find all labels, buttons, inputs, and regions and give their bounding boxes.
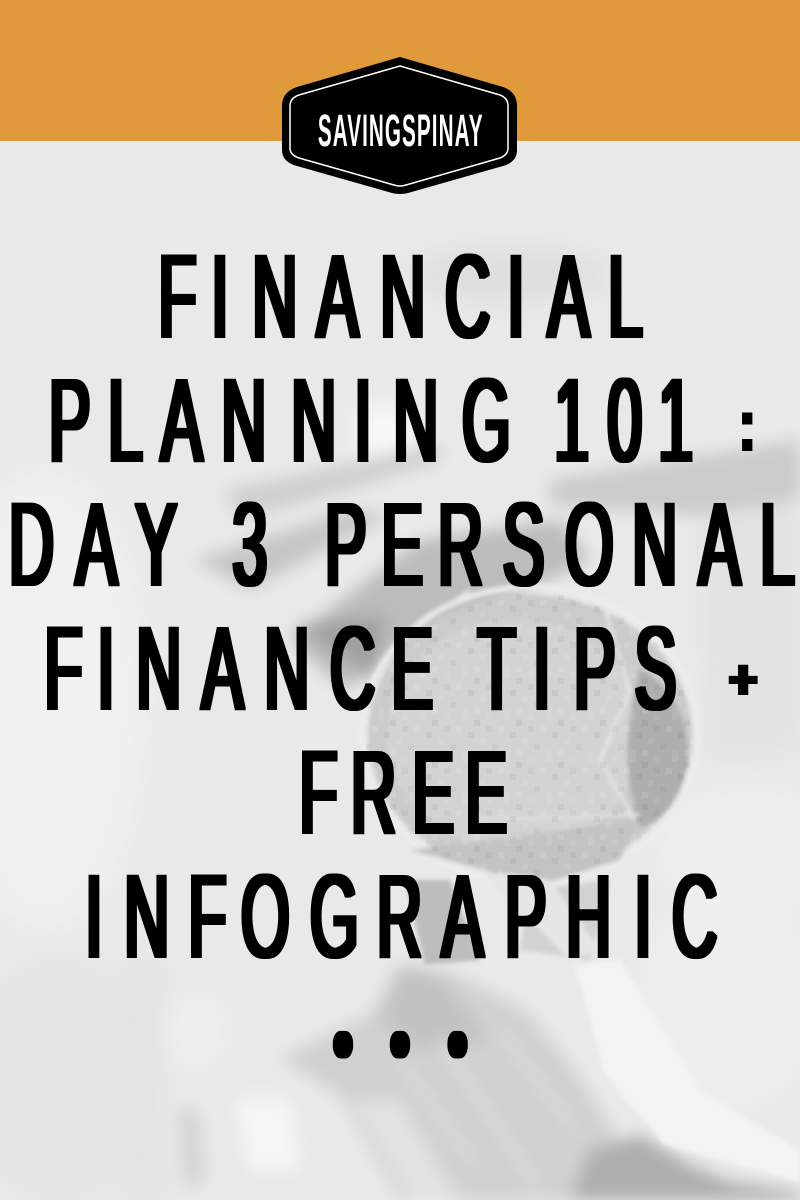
logo badge — [282, 57, 517, 194]
badge inner outline — [290, 66, 508, 186]
orange header band — [0, 0, 800, 141]
badge text: SAVINGSPINAY — [318, 106, 483, 156]
title line 1: FINANCIAL — [158, 232, 643, 363]
title line 3: DAY 3 PERSONAL — [9, 480, 795, 611]
title line 2: : — [741, 386, 754, 466]
title line 2: PLANNING 101 — [49, 356, 693, 487]
three dots: ••• — [333, 990, 468, 1097]
background photo: blurred coins — [175, 255, 800, 1200]
main title — [9, 232, 795, 1097]
plus sign: + — [729, 649, 757, 711]
title line 4: FINANCE TIPS — [44, 604, 676, 735]
title line 6: INFOGRAPHIC — [85, 852, 717, 983]
badge shape — [282, 57, 517, 194]
title line 5: FREE — [299, 728, 507, 859]
